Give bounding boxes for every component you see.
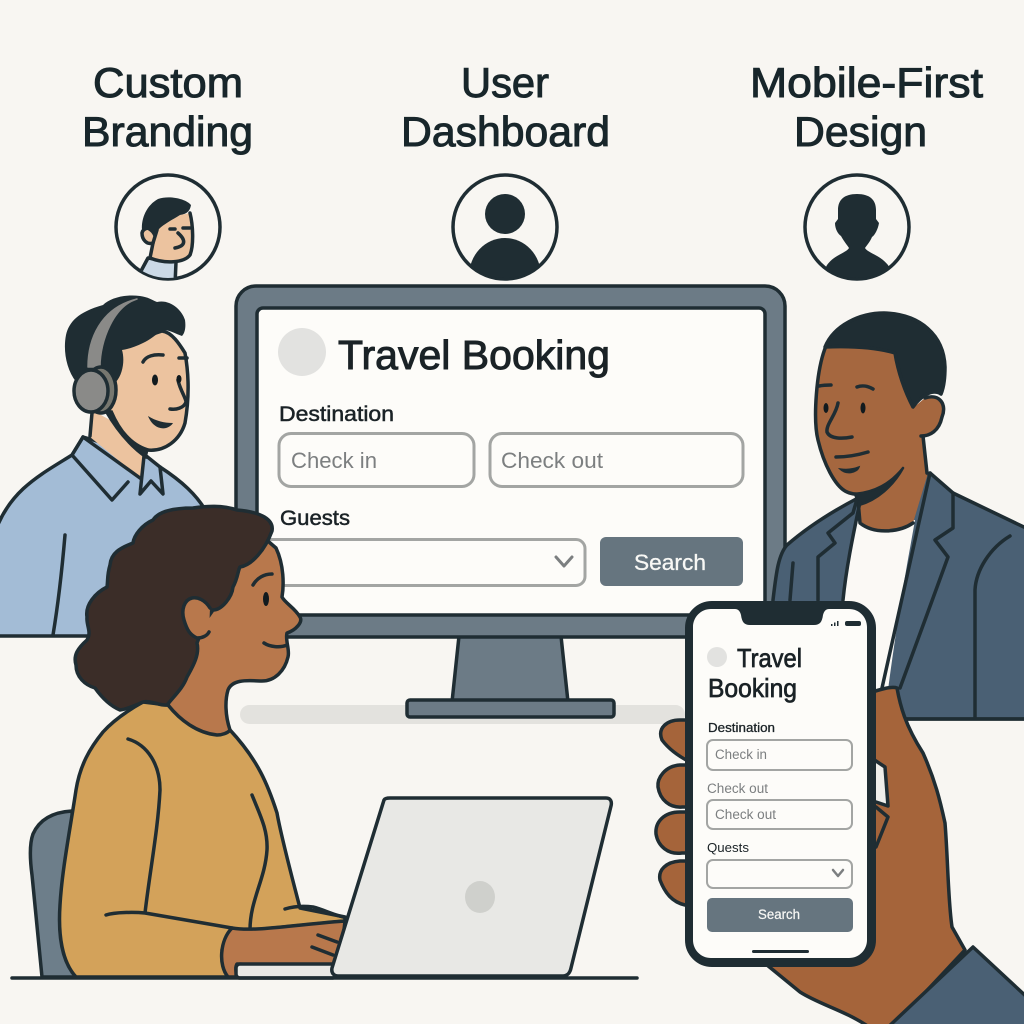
facial features bbox=[253, 574, 287, 647]
headset band bbox=[88, 299, 137, 367]
ear bbox=[183, 598, 210, 638]
phone title bbox=[708, 643, 802, 703]
heading: Custom Branding bbox=[82, 59, 253, 155]
heading: Mobile-First Design bbox=[750, 59, 983, 155]
collar bbox=[53, 437, 163, 635]
gap beside phone bbox=[870, 757, 888, 806]
hair bbox=[75, 506, 272, 710]
heading: Custom Branding: Branding bbox=[82, 108, 253, 155]
face and neck outline bbox=[816, 346, 944, 531]
facial features bbox=[819, 385, 873, 457]
home bar bbox=[752, 950, 809, 953]
heading: Mobile-First Design: Design bbox=[794, 108, 927, 155]
phone label destination: Destination bbox=[708, 720, 775, 735]
laptop logo bbox=[465, 881, 495, 913]
search button bbox=[600, 537, 743, 586]
person: man in blazer bbox=[770, 313, 1024, 719]
logo placeholder bbox=[278, 328, 326, 376]
sweater bbox=[60, 702, 345, 977]
laptop lid bbox=[332, 798, 611, 976]
hair bbox=[825, 313, 945, 407]
phone label check out: Check out bbox=[707, 781, 768, 796]
neck bbox=[90, 410, 146, 478]
phone field check out bbox=[707, 800, 852, 829]
shadow under monitor bbox=[240, 705, 685, 724]
hand holding phone bbox=[656, 687, 1024, 1024]
field check in: Check in bbox=[291, 448, 377, 473]
phone logo bbox=[707, 647, 727, 667]
blazer lapels bbox=[770, 473, 1024, 719]
phone screen bbox=[693, 609, 867, 958]
phone label quests: Quests bbox=[707, 840, 750, 855]
headset cup bbox=[86, 367, 116, 413]
phone field check out: Check out bbox=[715, 807, 776, 822]
fingers bbox=[656, 720, 700, 905]
hand detail beside phone bbox=[876, 807, 888, 847]
heading: User Dashboard bbox=[401, 59, 610, 155]
sleeve bbox=[885, 947, 1024, 1024]
field check out bbox=[490, 434, 743, 486]
field check out: Check out bbox=[501, 448, 603, 473]
bezel bbox=[236, 286, 785, 637]
laptop bbox=[236, 798, 611, 978]
keyboard base bbox=[236, 964, 336, 978]
monitor bbox=[236, 286, 785, 717]
person: man with headset bbox=[0, 295, 245, 636]
stand bbox=[452, 636, 568, 702]
blazer bbox=[770, 473, 1024, 719]
sweater lines bbox=[106, 739, 348, 930]
shirt bbox=[0, 437, 245, 636]
phone guests select bbox=[707, 860, 852, 888]
phone body bbox=[686, 602, 875, 966]
phone field check in: Check in bbox=[715, 747, 767, 762]
chin shadow bbox=[855, 468, 903, 505]
label guests: Guests bbox=[280, 507, 350, 530]
phone field check in bbox=[707, 740, 852, 770]
icon: mobile-first avatar bbox=[805, 175, 909, 290]
heading: Custom Branding: Custom bbox=[93, 59, 243, 106]
facial features bbox=[143, 355, 187, 409]
hair bbox=[65, 295, 185, 383]
palm bbox=[767, 687, 965, 1024]
heading: User Dashboard: User bbox=[461, 59, 549, 106]
chair bbox=[30, 811, 80, 977]
table line bbox=[12, 976, 637, 980]
phone title: Travel bbox=[737, 643, 802, 673]
jaw shadow bbox=[105, 411, 148, 458]
phone search button bbox=[707, 898, 853, 932]
label destination: Destination bbox=[279, 403, 394, 426]
screen bbox=[257, 308, 765, 615]
field check in bbox=[279, 434, 474, 486]
phone bbox=[686, 602, 875, 966]
heading: Mobile-First Design: Mobile-First bbox=[750, 59, 983, 106]
status icons bbox=[831, 621, 861, 626]
face bbox=[106, 331, 188, 450]
neck and face fill bbox=[815, 345, 944, 531]
neck and face bbox=[168, 530, 301, 735]
foot bbox=[407, 700, 614, 717]
icon: custom branding avatar bbox=[116, 175, 220, 285]
heading: User Dashboard: Dashboard bbox=[401, 108, 610, 155]
phone title: Booking bbox=[708, 673, 797, 703]
guests select bbox=[262, 540, 585, 586]
search button: Search bbox=[634, 550, 706, 575]
screen title: Travel Booking bbox=[338, 332, 610, 378]
phone search button: Search bbox=[758, 907, 800, 922]
person: woman with laptop bbox=[30, 506, 348, 977]
shirt bbox=[840, 520, 915, 690]
icon: user dashboard avatar bbox=[451, 173, 559, 281]
hand bbox=[222, 921, 345, 977]
